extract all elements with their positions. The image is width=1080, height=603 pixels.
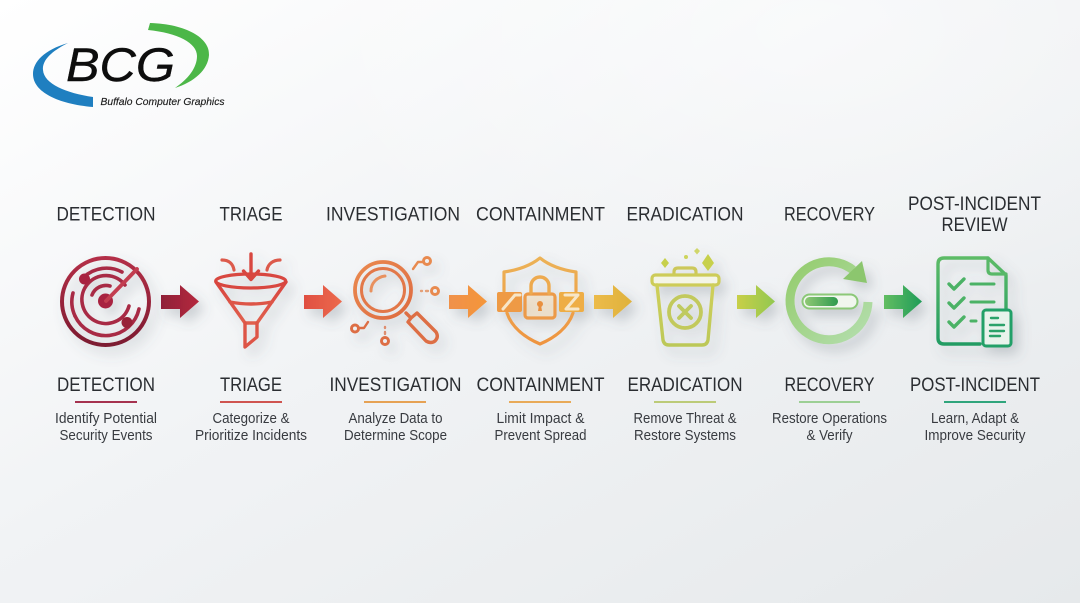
heading: Post-Incident Review: REVIEW	[942, 215, 1008, 236]
step label: Post-Incident: Improve Security	[924, 428, 1026, 444]
step label: Post-Incident: Learn, Adapt &	[931, 411, 1019, 427]
icon: magnifying glass	[352, 258, 438, 344]
step label: Detection: DETECTION	[57, 375, 155, 396]
step label: Triage: Categorize &	[212, 411, 290, 427]
step label: Containment: Prevent Spread	[494, 428, 587, 444]
icon: recovery cycle	[790, 261, 868, 340]
icon: checklist document	[938, 258, 1011, 346]
step label: Recovery: RECOVERY	[784, 375, 875, 396]
logo green swoosh	[148, 23, 209, 88]
icon: radar	[62, 258, 149, 345]
arrow: containment to eradication	[594, 285, 632, 318]
step label: Eradication: Restore Systems	[634, 428, 736, 444]
logo tagline: Buffalo Computer Graphics	[100, 97, 224, 108]
step label: Containment	[476, 375, 605, 444]
step label: Recovery: Restore Operations	[772, 411, 887, 427]
heading: Detection: DETECTION	[56, 204, 156, 226]
step label: Triage: TRIAGE	[220, 375, 282, 396]
heading: Eradication: ERADICATION	[626, 204, 744, 226]
heading: Containment: CONTAINMENT	[476, 204, 605, 226]
icon: trash bin	[652, 248, 719, 345]
step label: Investigation	[330, 375, 462, 444]
arrow: triage to investigation	[304, 285, 342, 318]
heading: Post-Incident Review: POST-INCIDENT	[908, 194, 1041, 215]
logo letters: BCG	[66, 38, 175, 91]
step label: Detection: Security Events	[60, 428, 152, 444]
step label: Post-Incident	[910, 375, 1040, 444]
arrow: investigation to containment	[449, 285, 487, 318]
step label: Eradication	[628, 375, 742, 444]
arrow: eradication to recovery	[737, 285, 775, 318]
step label: Post-Incident: POST-INCIDENT	[910, 375, 1040, 396]
step label: Triage: Prioritize Incidents	[195, 428, 307, 444]
logo blue swoosh	[33, 43, 93, 107]
heading: Investigation: INVESTIGATION	[326, 204, 460, 226]
heading: Recovery: RECOVERY	[784, 204, 875, 226]
logo: Buffalo Computer Graphics	[33, 23, 224, 108]
arrow: recovery to post-incident	[884, 285, 922, 318]
step label: Recovery	[772, 375, 887, 444]
step label: Containment: CONTAINMENT	[476, 375, 605, 396]
step label: Recovery: & Verify	[806, 428, 853, 444]
icon: funnel	[216, 254, 286, 347]
step label: Investigation: Analyze Data to	[348, 411, 443, 427]
step label: Eradication: ERADICATION	[628, 375, 742, 396]
step label: Containment: Limit Impact &	[496, 411, 585, 427]
icon: shield with lock	[497, 258, 584, 344]
step label: Detection: Identify Potential	[55, 411, 157, 427]
step label: Investigation: INVESTIGATION	[330, 375, 462, 396]
step label: Triage	[195, 375, 307, 444]
heading: Post-Incident Review	[908, 194, 1041, 236]
step label: Detection	[55, 375, 157, 444]
arrow: detection to triage	[161, 285, 199, 318]
step label: Eradication: Remove Threat &	[634, 411, 737, 427]
heading: Triage: TRIAGE	[220, 204, 282, 226]
step label: Investigation: Determine Scope	[344, 428, 447, 444]
